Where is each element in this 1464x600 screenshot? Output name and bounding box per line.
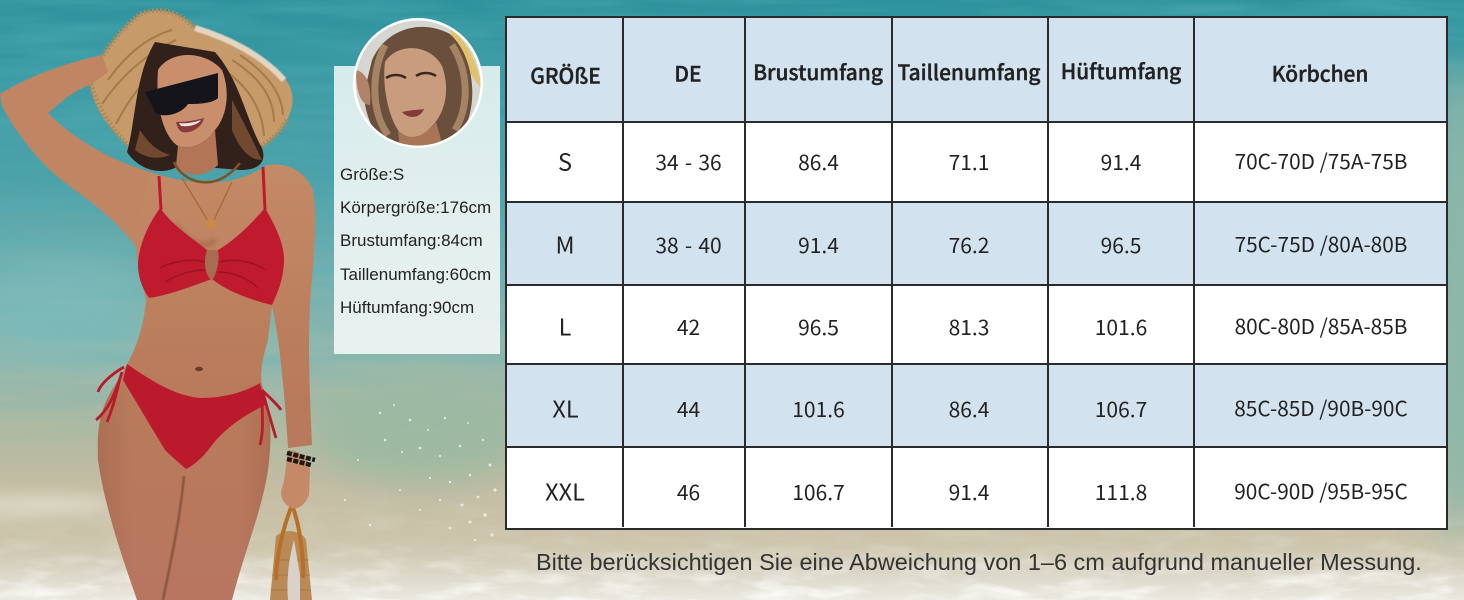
smile xyxy=(176,118,204,132)
table header row: Hüftumfang xyxy=(1061,56,1181,86)
row S: S xyxy=(558,144,572,178)
table header row: Brustumfang xyxy=(753,57,883,87)
panel: model measurements xyxy=(334,66,500,354)
water sparkle xyxy=(344,404,497,541)
row XXL: 90C-90D /95B-95C xyxy=(1234,475,1408,505)
row XL: 85C-85D /90B-90C xyxy=(1234,392,1408,422)
necklaces xyxy=(174,162,240,182)
raised arm xyxy=(0,55,172,250)
bracelet xyxy=(287,453,315,465)
row XL: 44 xyxy=(677,394,700,424)
face xyxy=(157,55,227,147)
row M: 75C-75D /80A-80B xyxy=(1235,228,1407,258)
woven bag xyxy=(270,505,312,600)
model portrait xyxy=(353,18,483,150)
bikini top xyxy=(138,208,284,305)
row S: 86.4 xyxy=(798,147,839,177)
model size text: Körpergröße:176cm xyxy=(340,198,491,217)
row XXL: 106.7 xyxy=(792,477,845,507)
row L: L xyxy=(559,308,572,342)
bikini straps xyxy=(159,167,265,210)
row XL: XL xyxy=(552,390,579,424)
table row backgrounds xyxy=(506,17,1447,529)
row XL: 101.6 xyxy=(792,394,845,424)
row S: 71.1 xyxy=(949,147,989,177)
model size text: Taillenumfang:60cm xyxy=(340,265,491,284)
row XXL xyxy=(545,474,1408,508)
row S: 70C-70D /75A-75B xyxy=(1235,145,1407,175)
row XL: 106.7 xyxy=(1095,394,1147,424)
side ties xyxy=(96,367,281,445)
row M: M xyxy=(555,226,575,260)
row XXL: XXL xyxy=(545,474,585,508)
table header row xyxy=(530,56,1368,90)
table header row: DE xyxy=(674,58,702,88)
row S xyxy=(558,144,1407,178)
hair xyxy=(127,42,263,171)
bikini bottom xyxy=(123,364,265,469)
table header row: Taillenumfang xyxy=(898,57,1040,87)
row L xyxy=(559,308,1407,342)
table header row: Körbchen xyxy=(1272,58,1368,88)
row L: 42 xyxy=(677,312,700,342)
row XXL: 46 xyxy=(677,477,700,507)
straw hat xyxy=(90,10,293,148)
row L: 81.3 xyxy=(949,312,989,342)
row L: 96.5 xyxy=(798,312,839,342)
row S: 34 - 36 xyxy=(655,147,722,177)
measurement note: Bitte berücksichtigen Sie eine Abweichung von 1–6 cm aufgrund manueller Messung. xyxy=(536,549,1422,575)
hand on bag xyxy=(281,450,310,508)
torso and legs xyxy=(98,164,315,600)
sunglasses xyxy=(145,73,218,115)
model size text: Hüftumfang:90cm xyxy=(340,298,474,317)
row XL xyxy=(552,390,1408,424)
row XXL: 111.8 xyxy=(1095,477,1147,507)
size table xyxy=(506,17,1447,529)
row L: 101.6 xyxy=(1095,312,1147,342)
row M: 91.4 xyxy=(798,230,839,260)
table header row: GRÖßE xyxy=(530,60,601,90)
woman in red bikini xyxy=(0,10,315,600)
row L: 80C-80D /85A-85B xyxy=(1235,310,1407,340)
row XL: 86.4 xyxy=(949,394,989,424)
model size text: Brustumfang:84cm xyxy=(340,231,483,250)
row XXL: 91.4 xyxy=(949,477,989,507)
row S: 91.4 xyxy=(1101,147,1141,177)
row M: 38 - 40 xyxy=(655,230,722,260)
model size text: Größe:S xyxy=(340,165,404,184)
row M: 96.5 xyxy=(1101,230,1141,260)
row M: 76.2 xyxy=(949,230,989,260)
model size text xyxy=(340,165,491,317)
row M xyxy=(555,226,1407,260)
